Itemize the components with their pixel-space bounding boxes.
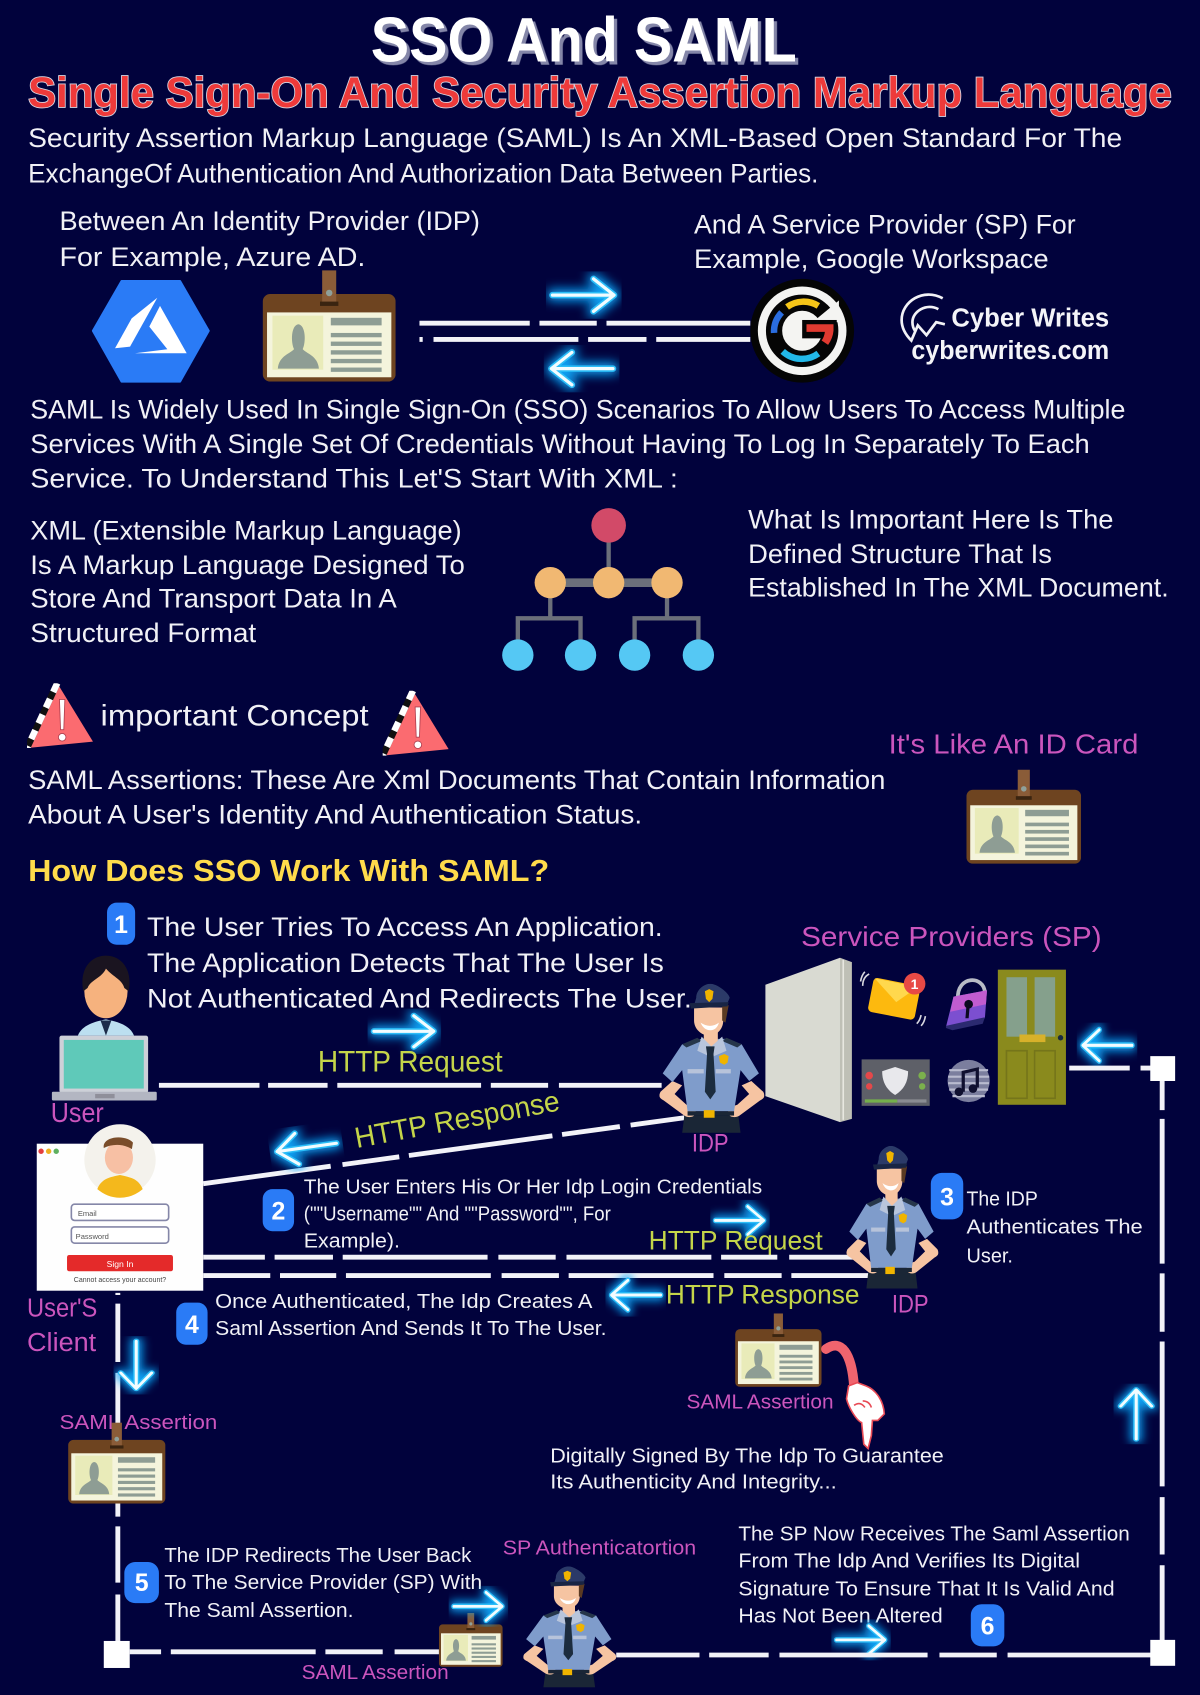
- text: defined structure: Established In The XML Document.: [748, 573, 1169, 603]
- arrow: http request 1: [374, 1016, 434, 1047]
- badge 1: [107, 903, 135, 945]
- arrow: into service provider: [1083, 1030, 1132, 1061]
- icon: google: [750, 279, 854, 383]
- icon: idp officer 2: [846, 1146, 938, 1289]
- icon: warning left: [27, 683, 93, 748]
- text: saml assertions: SAML Assertions: These Are Xml Documents That Contain Information: [28, 765, 885, 795]
- text: defined structure: What Is Important Here Is The: [748, 505, 1114, 535]
- label: saml assertion bottom: SAML Assertion: [302, 1661, 449, 1684]
- line: bottom right: [616, 1653, 1152, 1657]
- text: identity provider: For Example, Azure AD.: [59, 242, 365, 272]
- text: identity provider: Between An Identity Provider (IDP): [59, 206, 480, 236]
- text: step 2: [304, 1175, 762, 1252]
- text: saml usage: SAML Is Widely Used In Single Sign-On (SSO) Scenarios To Allow Users To Access Multiple: [30, 394, 1125, 424]
- icon: id card bottom: [439, 1613, 503, 1667]
- label: users client: Client: [27, 1329, 97, 1357]
- text: step 1: The Application Detects That The User Is: [147, 948, 664, 978]
- text: step 1: The User Tries To Access An Application.: [147, 912, 663, 942]
- label: sp authenticator: SP Authenticatortion: [503, 1536, 696, 1559]
- badge 4: 4: [185, 1311, 199, 1339]
- logo: cyber writes: cyberwrites.com: [911, 337, 1109, 365]
- badge 2: 2: [271, 1197, 285, 1225]
- icon: id card: [263, 270, 396, 382]
- arrow: to sp: [454, 1592, 502, 1620]
- text: saml assertions: [28, 765, 885, 830]
- text: saml usage: Service. To Understand This Let'S Start With XML :: [30, 464, 678, 494]
- line: bottom left: [130, 1650, 439, 1654]
- text: saml assertions: About A User's Identity And Authentication Status.: [28, 800, 642, 830]
- label: id card: It's Like An ID Card: [889, 728, 1138, 759]
- line: http request 1: [159, 1083, 662, 1088]
- arrow: exchange right: [552, 279, 614, 311]
- label: idp 1: IDP: [692, 1129, 729, 1157]
- node: bottom left: [104, 1641, 130, 1668]
- text: step 1: Not Authenticated And Redirects The User.: [147, 983, 692, 1013]
- text: step 4: [215, 1290, 606, 1340]
- panel: login window: Sign In: [107, 1259, 134, 1269]
- text: step 5: To The Service Provider (SP) With: [164, 1571, 482, 1594]
- text: defined structure: Defined Structure That Is: [748, 539, 1052, 569]
- intro text: Security Assertion Markup Language (SAML) Is An XML-Based Open Standard For The: [28, 123, 1122, 153]
- text: xml definition: Structured Format: [30, 618, 257, 648]
- label: user: User: [51, 1097, 104, 1128]
- badge 4: [176, 1303, 208, 1345]
- badge 5: 5: [135, 1569, 149, 1597]
- subtitle: Single Sign-On And Security Assertion Markup Language: [28, 69, 1172, 116]
- text: defined structure: [748, 505, 1169, 603]
- icon: security dashboard: [862, 1059, 930, 1106]
- arrow: down: [121, 1341, 152, 1389]
- text: step 2: The User Enters His Or Her Idp Login Credentials: [304, 1175, 762, 1198]
- text: saml usage: [30, 394, 1125, 494]
- panel: login window: Password: [76, 1232, 109, 1241]
- arrow: exchange left: [551, 352, 613, 385]
- text: step 3: The IDP: [966, 1187, 1038, 1210]
- text: step 2: (""Username"" And ""Password"", For: [304, 1202, 611, 1225]
- text: service provider: And A Service Provider (SP) For: [694, 209, 1076, 239]
- line: back to service provider: [1069, 1066, 1152, 1070]
- icon: lock: [946, 980, 987, 1030]
- text: step 4: Saml Assertion And Sends It To The User.: [215, 1317, 606, 1340]
- heading: how does sso work: How Does SSO Work With SAML?: [28, 855, 549, 888]
- chart: xml tree: [502, 508, 714, 671]
- arrow: http response 1: [275, 1128, 339, 1167]
- text: step 3: [966, 1187, 1143, 1268]
- text: digitally signed: Its Authenticity And Integrity...: [550, 1471, 837, 1494]
- text: step 6: Signature To Ensure That It Is Valid And: [738, 1578, 1115, 1601]
- node: top right: [1150, 1056, 1175, 1081]
- label: saml assertion left: SAML Assertion: [59, 1411, 217, 1434]
- badge 3: [931, 1173, 963, 1219]
- icon: warning right: [383, 691, 449, 756]
- text: identity provider: [59, 206, 480, 272]
- intro text: [28, 123, 1122, 189]
- text: step 5: [164, 1544, 482, 1622]
- icon: mail: 1: [911, 976, 919, 992]
- arrow: up: [1121, 1390, 1152, 1439]
- logo: cyber writes: [902, 295, 1109, 365]
- label: http response 2: HTTP Response: [666, 1280, 859, 1310]
- arrow: to right: [836, 1626, 885, 1654]
- badge 5: [124, 1562, 159, 1603]
- text: step 3: User.: [966, 1245, 1013, 1268]
- text: digitally signed: Digitally Signed By The Idp To Guarantee: [550, 1445, 944, 1468]
- line: http response 1: [203, 1118, 684, 1184]
- icon: id card left: [68, 1423, 165, 1504]
- heading: important concept: important Concept: [101, 700, 369, 732]
- icon: user at laptop: [52, 956, 157, 1100]
- panel: login window: [37, 1124, 203, 1291]
- label: users client: User'S: [27, 1295, 97, 1323]
- label: service providers: Service Providers (SP): [801, 921, 1102, 952]
- node: bottom right: [1150, 1640, 1175, 1666]
- label: http request 1: HTTP Request: [318, 1046, 503, 1078]
- text: service provider: [694, 209, 1076, 274]
- text: xml definition: Store And Transport Data In A: [30, 584, 397, 614]
- badge 6: 6: [981, 1612, 994, 1640]
- icon: door: [998, 970, 1066, 1105]
- text: step 6: [738, 1522, 1130, 1628]
- text: xml definition: Is A Markup Language Designed To: [30, 550, 465, 580]
- icon: id card centre: [735, 1313, 822, 1387]
- icon: azure hexagon: [93, 281, 209, 382]
- icon: mail: [861, 972, 925, 1026]
- text: step 2: Example).: [304, 1229, 400, 1252]
- text: step 6: The SP Now Receives The Saml Assertion: [738, 1522, 1130, 1545]
- badge 6: [971, 1604, 1004, 1646]
- badge 3: 3: [940, 1183, 954, 1211]
- text: service provider: Example, Google Workspace: [694, 244, 1049, 274]
- label: saml assertion centre: SAML Assertion: [686, 1391, 834, 1414]
- icon: sp officer: [523, 1566, 616, 1687]
- title: SSO And SAML: [371, 6, 797, 76]
- line: right vertical: [1160, 1081, 1164, 1642]
- label: users client: [27, 1295, 97, 1357]
- text: step 3: Authenticates The: [966, 1215, 1143, 1238]
- label: idp 2: IDP: [892, 1290, 929, 1318]
- text: step 6: From The Idp And Verifies Its Digital: [738, 1549, 1080, 1572]
- line: left vertical: [116, 1293, 120, 1643]
- lines: request and response 2: [203, 1257, 871, 1276]
- connector lines: [419, 323, 751, 339]
- text: step 5: The IDP Redirects The User Back: [164, 1544, 472, 1567]
- intro text: ExchangeOf Authentication And Authorization Data Between Parties.: [28, 159, 818, 189]
- arrow: http response 2: [611, 1280, 661, 1310]
- label: http response 1: HTTP Response: [352, 1086, 562, 1155]
- text: step 4: Once Authenticated, The Idp Creates A: [215, 1290, 593, 1313]
- badge 2: [263, 1189, 294, 1231]
- icon: music: [948, 1060, 990, 1102]
- badge 1: 1: [114, 911, 128, 939]
- text: digitally signed: [550, 1445, 944, 1494]
- text: xml definition: XML (Extensible Markup Language): [30, 515, 462, 545]
- text: step 6: Has Not Been Altered: [738, 1605, 943, 1628]
- icon: idp officer 1: [659, 984, 764, 1133]
- text: saml usage: Services With A Single Set Of Credentials Without Having To Log In Separately To Each: [30, 429, 1090, 459]
- text: step 1: [147, 912, 692, 1013]
- arrow: http request 2: [715, 1206, 764, 1234]
- text: xml definition: [30, 515, 465, 648]
- panel: login window: Email: [78, 1209, 97, 1218]
- icon: id card right: [966, 770, 1081, 864]
- icon: wall: [765, 958, 852, 1122]
- label: http request 2: HTTP Request: [649, 1226, 823, 1256]
- text: step 5: The Saml Assertion.: [164, 1599, 354, 1622]
- logo: cyber writes: Cyber Writes: [951, 304, 1109, 332]
- panel: login window: Cannot access your account?: [74, 1277, 166, 1284]
- icon: pointing hand: [826, 1346, 884, 1449]
